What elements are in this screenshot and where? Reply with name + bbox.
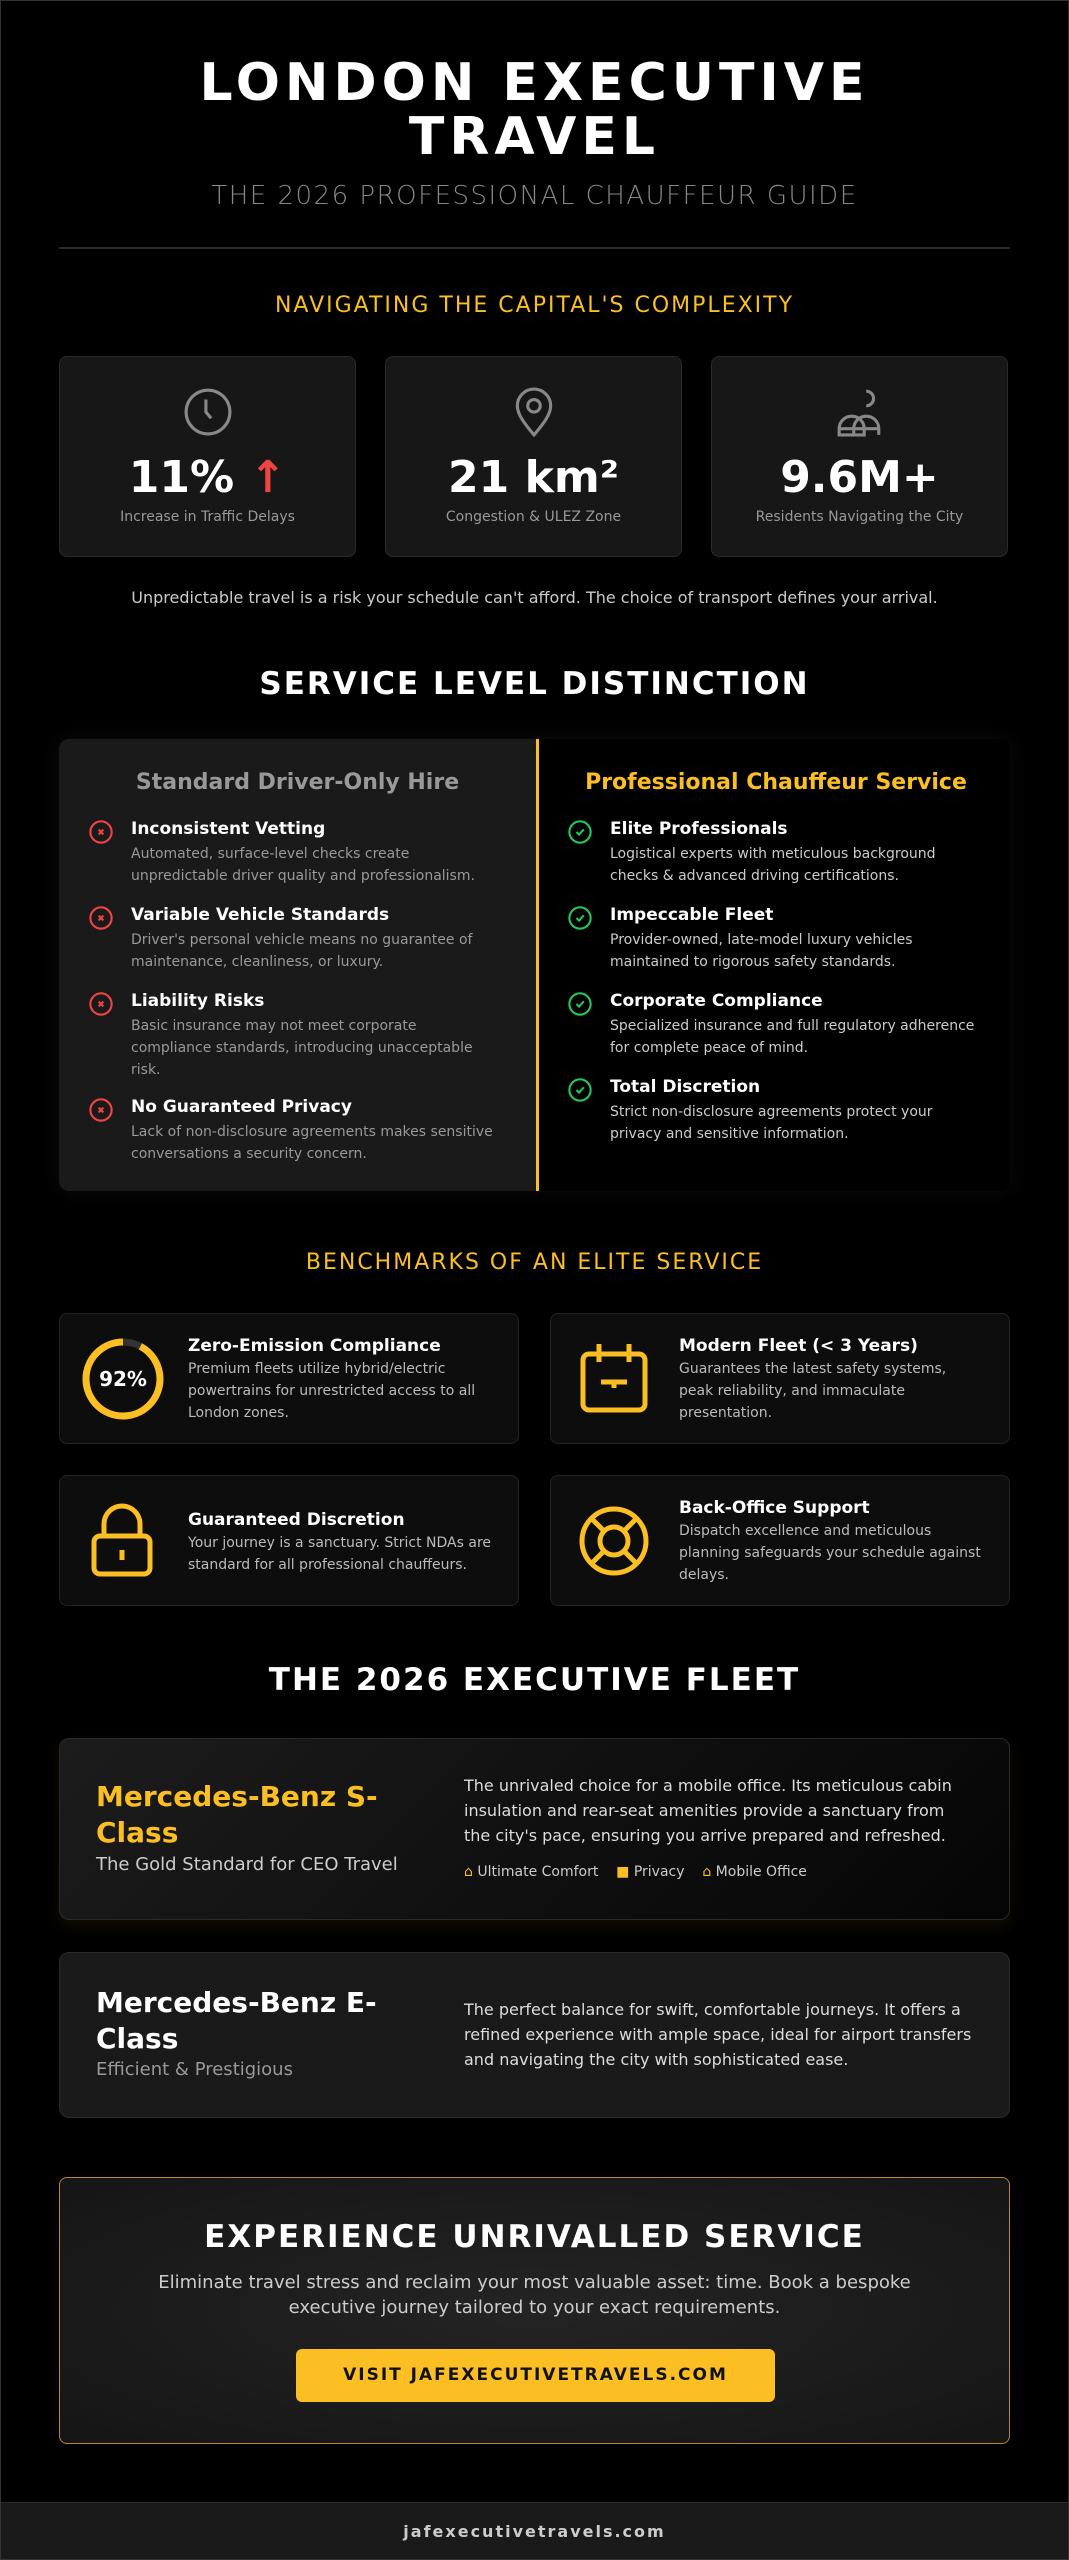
- footer: [1, 2502, 1068, 2559]
- fleet card: E-Class: Mercedes-Benz E-Class: [96, 1986, 377, 2055]
- icon: pin: [516, 388, 552, 437]
- fleet card: S-Class: The unrivaled choice for a mobile office. Its meticulous cabin insulation and rear-seat amenities provide a sanctuary from the city's pace, ensuring you arrive prepared and refreshed.: [464, 1776, 952, 1845]
- benchmark: modern fleet: Modern Fleet (< 3 Years): [679, 1336, 918, 1356]
- fleet card: S-Class: Mercedes-Benz S-Class: [96, 1780, 378, 1849]
- icon: calendar: [580, 1344, 648, 1412]
- panel: professional chauffeur: Specialized insurance and full regulatory adherence for complete peace of mind.: [610, 1018, 974, 1056]
- fleet card: S-Class: The Gold Standard for CEO Travel: [96, 1854, 398, 1875]
- title: LONDON EXECUTIVE: [199, 53, 870, 113]
- benchmark: discretion: [59, 1475, 519, 1606]
- benchmark: discretion: Guaranteed Discretion: [188, 1510, 405, 1530]
- panel: standard hire: No Guaranteed Privacy: [131, 1097, 352, 1117]
- fleet card: E-Class: Efficient & Prestigious: [96, 2059, 293, 2080]
- CTA button: VISIT JAFEXECUTIVETRAVELS.COM: [343, 2365, 728, 2385]
- fleet card: E-Class: The perfect balance for swift, comfortable journeys. It offers a refined experience with ample space, ideal for airport transfers and navigating the city with sophisticated ease.: [464, 2000, 971, 2069]
- panel: standard hire: [59, 739, 536, 1191]
- panel: standard hire: Driver's personal vehicle means no guarantee of maintenance, cleanliness, or luxury.: [131, 932, 472, 970]
- heading: service level: SERVICE LEVEL DISTINCTION: [259, 666, 810, 702]
- benchmark: modern fleet: [550, 1313, 1010, 1444]
- benchmark: zero emission: Zero-Emission Compliance: [188, 1336, 441, 1356]
- benchmark: modern fleet: Guarantees the latest safety systems, peak reliability, and immaculate presentation.: [679, 1361, 946, 1421]
- panel: standard hire: Automated, surface-level checks create unpredictable driver quality and professionalism.: [131, 846, 475, 884]
- benchmark: back office: Back-Office Support: [679, 1498, 870, 1518]
- title: [199, 53, 870, 167]
- stat card: zone: 21 km²: [448, 452, 619, 503]
- CTA text: Eliminate travel stress and reclaim your most valuable asset: time. Book a bespoke executive journey tailored to your exact requirements.: [158, 2272, 911, 2318]
- title: TRAVEL: [409, 107, 660, 167]
- subtitle: THE 2026 PROFESSIONAL CHAUFFEUR GUIDE: [211, 181, 858, 211]
- panel: standard hire: Inconsistent Vetting: [131, 819, 325, 839]
- benchmark: discretion: Your journey is a sanctuary. Strict NDAs are standard for all professional chauffeurs.: [188, 1535, 491, 1573]
- fleet card: E-Class: [59, 1952, 1010, 2118]
- panel: professional chauffeur: Elite Professionals: [610, 819, 788, 839]
- benchmark: zero emission: [59, 1313, 519, 1444]
- tagline: Unpredictable travel is a risk your schedule can't afford. The choice of transport defines your arrival.: [131, 588, 938, 607]
- icon: 92% ring: [82, 1338, 164, 1420]
- CTA panel: [59, 2177, 1010, 2444]
- panel: standard hire: Variable Vehicle Standards: [131, 905, 389, 925]
- icon: lifebuoy: [580, 1506, 648, 1576]
- heading: fleet: THE 2026 EXECUTIVE FLEET: [269, 1662, 800, 1698]
- panel: professional chauffeur: [536, 739, 1010, 1191]
- panel: standard hire: Lack of non-disclosure agreements makes sensitive conversations a security concern.: [131, 1124, 493, 1162]
- icon: people: [838, 390, 880, 436]
- panel: professional chauffeur: Total Discretion: [610, 1077, 760, 1097]
- icon: 92% ring: 92%: [99, 1367, 147, 1391]
- benchmark: back office: Dispatch excellence and meticulous planning safeguards your schedule against delays.: [679, 1523, 981, 1583]
- stat card: residents: Residents Navigating the City: [756, 509, 963, 525]
- icon: clock: [184, 388, 232, 436]
- stat card: residents: 9.6M+: [780, 452, 939, 503]
- stat card: traffic: Increase in Traffic Delays: [120, 509, 295, 525]
- icon: lock: [92, 1504, 152, 1576]
- panel: professional chauffeur: Strict non-disclosure agreements protect your privacy and sensitive information.: [610, 1104, 933, 1142]
- fleet card: S-Class: [59, 1738, 1010, 1920]
- panel: professional chauffeur: Impeccable Fleet: [610, 905, 773, 925]
- CTA button: [296, 2349, 775, 2402]
- benchmark: zero emission: Premium fleets utilize hybrid/electric powertrains for unrestricted access to all London zones.: [188, 1361, 475, 1421]
- panel: standard hire: Liability Risks: [131, 991, 264, 1011]
- section heading: benchmarks: BENCHMARKS OF AN ELITE SERVICE: [306, 1250, 763, 1275]
- panel: standard hire: Basic insurance may not meet corporate compliance standards, introducing unacceptable risk.: [131, 1018, 473, 1078]
- panel: standard hire: Standard Driver-Only Hire: [136, 770, 459, 795]
- footer: jafexecutivetravels.com: [403, 2522, 666, 2541]
- stat card: zone: [385, 356, 682, 557]
- stat card: traffic: 11% ↑: [129, 452, 286, 503]
- feature tags: ⌂ Ultimate Comfort ■ Privacy ⌂ Mobile Office: [464, 1864, 807, 1880]
- panel: professional chauffeur: Logistical experts with meticulous background checks & advanced driving certifications.: [610, 846, 936, 884]
- stat card: zone: Congestion & ULEZ Zone: [446, 509, 621, 525]
- section heading: complexity: NAVIGATING THE CAPITAL'S COMPLEXITY: [275, 293, 794, 318]
- comparison panel: [59, 739, 1010, 1191]
- benchmark: back office: [550, 1475, 1010, 1606]
- CTA heading: EXPERIENCE UNRIVALLED SERVICE: [204, 2219, 865, 2255]
- stat card: traffic: [59, 356, 356, 557]
- stat card: residents: [711, 356, 1008, 557]
- panel: professional chauffeur: Provider-owned, late-model luxury vehicles maintained to rigorous safety standards.: [610, 932, 913, 970]
- panel: professional chauffeur: Professional Chauffeur Service: [585, 770, 967, 795]
- panel: professional chauffeur: Corporate Compliance: [610, 991, 823, 1011]
